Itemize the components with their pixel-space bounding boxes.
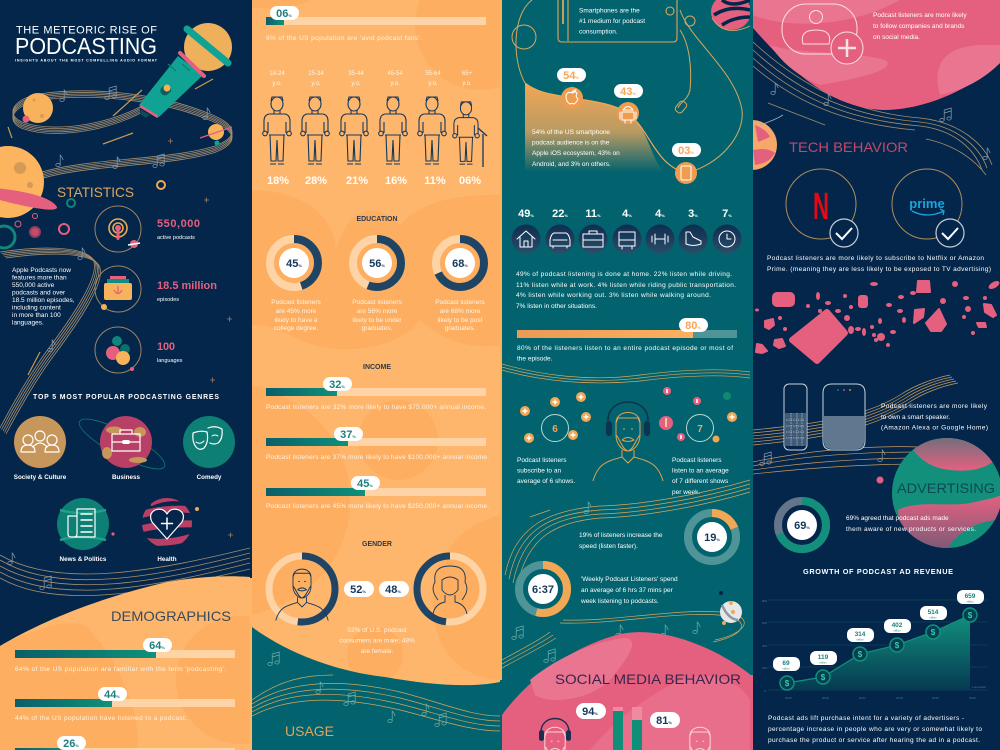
- donut: listen faster: 19%: [704, 532, 720, 544]
- genre: business: [78, 416, 166, 479]
- genre: news and politics: News & Politics: [60, 556, 107, 563]
- area chart: ad revenue: 2016: [822, 696, 829, 700]
- text: smartphone share: podcast audience is on the: [532, 140, 610, 146]
- bubble: 81 percent: 81%: [656, 715, 672, 727]
- callout: 514 million: 514: [928, 609, 939, 616]
- callout: 119 million: million: [819, 662, 827, 664]
- callout: 402 million: 402: [892, 622, 903, 629]
- callout: 119 million: 119: [818, 654, 829, 661]
- age figures: [263, 97, 487, 167]
- listening location numbers: 4%: [655, 208, 665, 220]
- icon: netflix: N: [813, 186, 829, 228]
- music notes: [268, 652, 446, 727]
- stat: listen to 7 shows: listen to an average: [672, 468, 729, 474]
- stat: episodes: 18.5 million: [157, 280, 217, 292]
- text: netflix and prime: [767, 255, 991, 273]
- area chart: ad revenue: 2019: [932, 696, 939, 700]
- heading: education: EDUCATION: [356, 216, 398, 223]
- bubble: others 3 percent: [672, 143, 701, 157]
- bar: income 100000: 37%: [340, 429, 356, 441]
- donut: female: [417, 556, 483, 622]
- text: apple podcasts summary: in more than 100: [12, 312, 61, 319]
- stat: subscribe to 6 shows: [517, 392, 591, 485]
- bar: avid podcast fans: [266, 6, 486, 42]
- stat: listen to 7 shows: of 7 different shows: [672, 478, 729, 485]
- text: apple podcasts summary: podcasts and over: [12, 290, 66, 296]
- genre: health: Health: [157, 556, 177, 563]
- bar: income 100000: Podcast listeners are 37% more likely to have $100,000+ annual income.: [266, 454, 489, 461]
- bar: income 100000: [266, 427, 489, 461]
- text: gender summary: are female.: [361, 648, 393, 655]
- genre: comedy: [183, 416, 235, 481]
- text: weekly listening time: [580, 576, 678, 605]
- icon: netflix: [786, 169, 858, 247]
- orange background blobs: [252, 0, 500, 680]
- donut: post graduates: likely to be post: [438, 317, 483, 324]
- age percentages: [268, 176, 481, 184]
- stat: subscribe to 6 shows: 6: [552, 424, 558, 435]
- callout: 659 million: [957, 590, 984, 604]
- title: [15, 24, 158, 62]
- donut: under graduates: are 56% more: [357, 308, 398, 315]
- bubble: 94 percent: 94%: [582, 706, 598, 718]
- donut: college degree: [270, 239, 321, 332]
- planet: tech: [727, 115, 783, 170]
- text: apple podcasts summary: 18.5 million episodes,: [12, 297, 75, 304]
- callout: 69 million: [773, 657, 800, 671]
- stave mid usage: [505, 480, 750, 587]
- icon: follow person: [782, 4, 863, 64]
- text: smart speaker: (Amazon Alexa or Google Home): [881, 424, 988, 432]
- area chart: ad revenue: 800: [762, 599, 767, 603]
- bubble: 48 percent: 48%: [385, 584, 401, 596]
- text: apple podcasts summary: [12, 267, 75, 326]
- stave in usage header: [252, 675, 500, 731]
- bubble: Android 43 percent: 43%: [620, 86, 636, 98]
- heading: top 5 genres: TOP 5 MOST POPULAR PODCASTING GENRES: [33, 394, 219, 401]
- area chart: ad revenue: [762, 599, 988, 700]
- area chart: ad revenue: 2015: [785, 696, 792, 700]
- heading: usage: USAGE: [285, 723, 334, 739]
- callout: 69 million: 69: [782, 660, 790, 667]
- stat: listen to 7 shows: per week.: [672, 489, 700, 496]
- area chart: ad revenue: $: [785, 679, 790, 688]
- bubble: 81 percent: [650, 712, 680, 728]
- bubble: 52 percent: 52%: [350, 584, 366, 596]
- bar: income 250000: [266, 476, 489, 510]
- area chart: ad revenue: 0: [764, 689, 766, 693]
- bubble: 48 percent: [379, 581, 409, 597]
- column 4 background: [752, 0, 1000, 750]
- text: smartphone share: Android, and 3% on others.: [532, 161, 611, 168]
- bar: monthly listeners: 26%: [63, 738, 79, 750]
- genre: society and culture: Society & Culture: [14, 474, 67, 481]
- stat: episodes: episodes: [157, 297, 179, 303]
- text: weekly listening time: 'Weekly Podcast Listeners' spend: [581, 576, 678, 583]
- stat: episodes: [95, 266, 217, 312]
- bubble: Android 43 percent: [614, 84, 643, 98]
- age percentages: 28%: [305, 175, 327, 187]
- donut: college degree: are 45% more: [276, 308, 317, 315]
- text: weekly listening time: week listening to podcasts.: [580, 598, 659, 605]
- stave above social media: [502, 611, 744, 668]
- donut: under graduates: likely to be under: [352, 317, 402, 324]
- bar: listen to entire episode: 80% of the listeners listen to an entire podcast episode or most of: [517, 345, 733, 352]
- text: smart speaker: [881, 403, 988, 432]
- area chart: ad revenue: $: [858, 650, 863, 659]
- stave below bar: [502, 364, 750, 383]
- column 2 background: [250, 0, 500, 750]
- area chart: ad revenue: $: [931, 628, 936, 637]
- bar: familiar with podcasting: 64%: [149, 640, 165, 652]
- panel: demographics continued: [252, 0, 500, 750]
- text: purchase intent: purchase the product or service after hearing the ad in a podcast.: [768, 737, 980, 744]
- comet streaks: [8, 79, 213, 375]
- age percentages: 18%: [267, 175, 289, 187]
- donut: under graduates: Podcast listeners: [352, 299, 402, 306]
- age percentages: 21%: [346, 175, 368, 187]
- listening location numbers: 7%: [722, 208, 732, 220]
- area chart: ad revenue: Forecaster: [972, 685, 986, 689]
- donut: weekly listening time: 6:37: [532, 584, 554, 596]
- text: apple podcasts summary: including content: [12, 304, 61, 312]
- stat: active podcasts: 550,000: [157, 218, 200, 230]
- panel: demographics background: [0, 576, 250, 750]
- listening location numbers: 22%: [552, 208, 568, 220]
- stave lower band: [753, 375, 958, 474]
- panel: social media background: [502, 632, 752, 750]
- text: listen faster: speed (listen faster).: [579, 543, 638, 550]
- stave above demographics: [0, 548, 250, 596]
- callout: 314 million: million: [856, 638, 864, 642]
- text: follow brands: [873, 12, 967, 41]
- bar chart: social media: [613, 707, 642, 750]
- area chart: ad revenue: 2017: [859, 696, 866, 700]
- callout: 119 million: [810, 651, 837, 665]
- age labels: y.o.: [428, 81, 438, 87]
- text: purchase intent: percentage increase in people who are very or somewhat likely to: [768, 726, 982, 733]
- stat: subscribe to 6 shows: subscribe to an: [517, 468, 561, 474]
- lighter pink shapes: [530, 638, 750, 750]
- callout: 514 million: [920, 606, 947, 620]
- donut: ad awareness: 69%: [794, 520, 810, 532]
- area chart: ad revenue: 200: [762, 666, 767, 670]
- stat: listen to 7 shows: [659, 387, 737, 496]
- donut: male: [269, 556, 335, 622]
- text: purchase intent: [768, 715, 982, 744]
- callout: 659 million: 659: [965, 593, 976, 600]
- area chart: ad revenue: 2020: [969, 696, 976, 700]
- age labels: 35-44: [348, 71, 364, 77]
- stat: subscribe to 6 shows: Podcast listeners: [517, 457, 567, 464]
- bubble: iOS 54 percent: 54%: [563, 70, 579, 82]
- donut: college degree: 45%: [286, 258, 302, 270]
- title: INSIGHTS ABOUT THE MOST COMPELLING AUDIO FORMAT: [15, 58, 158, 62]
- text: listening locations: [516, 271, 736, 310]
- stat: listen to 7 shows: Podcast listeners: [672, 457, 722, 464]
- icon: google home speaker: [823, 384, 865, 450]
- age percentages: 16%: [385, 175, 407, 187]
- text: apple podcasts summary: languages.: [12, 320, 44, 326]
- icon: listener with headphones: [593, 402, 663, 481]
- donut: college degree: Podcast listeners: [271, 299, 321, 306]
- stat: subscribe to 6 shows: average of 6 shows.: [517, 478, 575, 485]
- donut: post graduates: 68%: [452, 258, 468, 270]
- bar: familiar with podcasting: 64% of the US population are familiar with the term 'podcasting'.: [15, 666, 226, 673]
- orange background blobs: [0, 616, 250, 750]
- heading: social media behavior: SOCIAL MEDIA BEHAVIOR: [555, 671, 741, 687]
- genre: society and culture: [14, 416, 67, 481]
- age labels: y.o.: [272, 81, 282, 87]
- text: smartphones number one: #1 medium for podcast: [579, 18, 645, 25]
- text: ad awareness: them aware of new products or services.: [846, 526, 976, 533]
- column 1 background: [0, 0, 250, 750]
- text: smartphones number one: consumption.: [579, 28, 618, 36]
- age labels: [269, 71, 473, 87]
- bar: familiar with podcasting: [15, 638, 235, 673]
- text: gender summary: consumers are male; 48%: [339, 638, 415, 644]
- stars: [168, 138, 233, 538]
- area chart: smartphone share: [525, 83, 697, 184]
- text: smart speaker: Podcast listeners are more likely: [881, 403, 988, 410]
- age labels: 65+: [462, 71, 473, 77]
- bubble: 94 percent: [576, 703, 606, 719]
- bar: income 250000: Podcast listeners are 45% more likely to have $250,000+ annual income.: [266, 503, 489, 510]
- age labels: 18-24: [269, 71, 285, 77]
- bubble: iOS 54 percent: [557, 68, 586, 82]
- bar: listened to a podcast: 44% of the US population have listened to a podcast.: [15, 715, 187, 722]
- planet: orange dots: [719, 591, 742, 625]
- text: follow brands: to follow companies and brands: [873, 23, 965, 30]
- callout: 402 million: million: [893, 630, 901, 632]
- bar: listen to entire episode: [517, 318, 737, 362]
- listening location numbers: 4%: [622, 208, 632, 220]
- text: listen faster: 19% of listeners increase the: [579, 532, 663, 539]
- music notes: [760, 83, 990, 466]
- donut: listen faster: [688, 513, 736, 561]
- callout: 314 million: 314: [855, 631, 866, 638]
- heading: income: INCOME: [363, 364, 391, 371]
- stat: active podcasts: [95, 206, 200, 252]
- listening location icons: [512, 224, 742, 254]
- bar: avid podcast fans: 6% of the US population are 'avid podcast fans'.: [266, 35, 422, 42]
- bar: listened to a podcast: [15, 687, 235, 722]
- text: listening locations: 4% listen while working out. 3% listen while walking around.: [516, 292, 711, 299]
- asteroid field: [756, 281, 996, 361]
- stat: languages: 100: [157, 341, 175, 353]
- text: netflix and prime: Prime. (meaning they are less likely to be exposed to TV advertising): [767, 266, 991, 273]
- listening location numbers: 49%: [518, 208, 534, 220]
- small ringed planet right: [200, 124, 232, 146]
- callout: 402 million: [884, 619, 911, 633]
- stave upper: [753, 42, 992, 175]
- planet: advertising: [890, 436, 1000, 550]
- area chart: ad revenue: $: [968, 611, 973, 620]
- text: follow brands: Podcast listeners are more likely: [873, 12, 967, 19]
- text: gender summary: [339, 627, 415, 655]
- text: ad awareness: [846, 515, 976, 533]
- text: apple podcasts summary: Apple Podcasts now: [12, 267, 71, 274]
- text: netflix and prime: Podcast listeners are more likely to subscribe to Netflix or Amazon: [767, 255, 984, 262]
- music notes: [512, 502, 700, 663]
- small asteroids: [755, 279, 1000, 347]
- genre: business: Business: [112, 474, 140, 481]
- donut: post graduates: [435, 239, 485, 332]
- text: smartphone share: [532, 129, 620, 168]
- donut: post graduates: graduates.: [445, 325, 476, 332]
- panel: usage column: [502, 0, 752, 750]
- text: apple podcasts summary: features more than: [12, 274, 67, 282]
- divider strip orange: [500, 0, 502, 680]
- panel: statistics column: [0, 23, 250, 750]
- text: listening locations: 7% listen in other situations.: [516, 303, 597, 310]
- heading: gender: GENDER: [362, 541, 392, 548]
- text: smartphones number one: [579, 8, 645, 36]
- stat: active podcasts: active podcasts: [157, 235, 195, 241]
- pink comet dot: [876, 476, 884, 484]
- heading: demographics: DEMOGRAPHICS: [111, 608, 231, 624]
- text: listen faster: [579, 532, 663, 550]
- bar: income 75000: 32%: [329, 379, 345, 391]
- donut: under graduates: graduates.: [362, 325, 393, 332]
- age percentages: 11%: [424, 175, 446, 187]
- panel: social media continued: [753, 0, 1000, 110]
- text: ad awareness: 69% agreed that podcast ads made: [846, 515, 949, 522]
- genre: comedy: Comedy: [197, 474, 222, 481]
- icon: smartphone outline: [558, 0, 677, 42]
- donut: ad awareness: [778, 501, 826, 549]
- bubble: 52 percent: [344, 581, 374, 597]
- panel: technology column: [727, 0, 1000, 744]
- planet top right: [711, 0, 751, 30]
- bar: listened to a podcast: 44%: [104, 689, 120, 701]
- heading: statistics: STATISTICS: [57, 184, 134, 200]
- text: follow brands: on social media.: [873, 34, 920, 41]
- title: THE METEORIC RISE OF: [16, 24, 157, 36]
- age percentages: 06%: [459, 175, 481, 187]
- area chart: ad revenue: 2018: [896, 696, 903, 700]
- callout: 69 million: million: [782, 668, 790, 670]
- text: apple podcasts summary: 550,000 active: [12, 282, 55, 289]
- icon: face without headphones: [670, 727, 730, 750]
- genre: health: [140, 498, 199, 563]
- icon: amazon echo speaker: [784, 384, 807, 450]
- decorative rings: [0, 181, 165, 248]
- callout: 314 million: [847, 628, 874, 642]
- area chart: ad revenue: $: [821, 673, 826, 682]
- donut: under graduates: [352, 239, 402, 332]
- listening location numbers: 11%: [585, 208, 601, 220]
- donut: college degree: likely to have a: [274, 317, 318, 324]
- text: smartphone share: Apple iOS ecosystem, 43% on: [532, 150, 620, 157]
- text: purchase intent: Podcast ads lift purchase intent for a variety of advertisers -: [768, 715, 964, 722]
- donut: under graduates: 56%: [369, 258, 385, 270]
- text: smart speaker: to own a smart speaker.: [881, 414, 950, 421]
- text: gender summary: 52% of U.S. podcast: [347, 627, 407, 634]
- stat: languages: [95, 327, 183, 373]
- age labels: 45-54: [387, 71, 403, 77]
- small planet left: [22, 93, 53, 123]
- donut: weekly listening time: [519, 565, 567, 613]
- age labels: y.o.: [311, 81, 321, 87]
- icon: amazon prime: prime: [909, 196, 945, 211]
- text: smartphones number one: Smartphones are the: [579, 8, 640, 14]
- callout: 659 million: million: [966, 600, 974, 604]
- column 3 background: [500, 0, 752, 750]
- callout: 514 million: million: [929, 616, 937, 620]
- age labels: 55-64: [425, 71, 441, 77]
- age labels: y.o.: [462, 81, 472, 87]
- divider strip navy: [250, 0, 252, 578]
- area chart: ad revenue: 400: [762, 644, 767, 648]
- area chart: ad revenue: $: [895, 641, 900, 650]
- music notes: [8, 86, 210, 590]
- lighter pink shapes: [753, 0, 1000, 95]
- orbit stave upper loop: [13, 91, 232, 178]
- bar: income 250000: 45%: [357, 478, 373, 490]
- donut: post graduates: are 68% more: [440, 308, 481, 315]
- bubble: others 3 percent: 03%: [678, 145, 694, 157]
- title: PODCASTING: [15, 33, 157, 59]
- large ringed planet: [0, 146, 57, 218]
- panel: usage background: [252, 627, 500, 750]
- divider strip pink: [750, 675, 753, 750]
- heading: tech behavior: TECH BEHAVIOR: [789, 139, 908, 155]
- bar: listen to entire episode: 80%: [685, 320, 701, 332]
- age labels: 25-34: [308, 71, 324, 77]
- heading: advertising: ADVERTISING: [897, 481, 995, 496]
- listening location numbers: 3%: [688, 208, 698, 220]
- text: weekly listening time: an average of 6 hrs 37 mins per: [581, 587, 674, 594]
- text: listening locations: 11% listen while at work. 4% listen while riding public transportation.: [516, 282, 736, 289]
- donut: college degree: college degree.: [274, 325, 318, 332]
- heading: growth of ad revenue: GROWTH OF PODCAST AD REVENUE: [803, 567, 953, 576]
- age labels: y.o.: [390, 81, 400, 87]
- text: smartphone share: 54% of the US smartphone: [532, 129, 610, 136]
- donut: post graduates: Podcast listeners: [435, 299, 485, 306]
- bar: avid podcast fans: 06%: [276, 8, 292, 20]
- area chart: ad revenue: 600: [762, 621, 767, 625]
- stat: listen to 7 shows: 7: [697, 424, 703, 435]
- age labels: y.o.: [351, 81, 361, 87]
- genre: news and politics: [57, 498, 115, 563]
- icon: earphone cable: [512, 0, 742, 173]
- orbit stave left curve: [0, 248, 100, 434]
- bar: monthly listeners: [15, 736, 235, 750]
- icon: amazon prime: [892, 169, 964, 247]
- bar: listen to entire episode: the episode.: [517, 356, 553, 362]
- stat: languages: languages: [157, 358, 183, 364]
- bar: income 75000: Podcast listeners are 32% more likely to have $75,000+ annual income.: [266, 404, 486, 411]
- icon: microphone: [139, 23, 232, 118]
- listening location numbers: [518, 208, 732, 220]
- icon: face with headphones: [525, 718, 585, 750]
- divider strip teal: [750, 0, 753, 675]
- bar: income 75000: [266, 377, 486, 411]
- text: listening locations: 49% of podcast listening is done at home. 22% listen while driving.: [516, 271, 732, 278]
